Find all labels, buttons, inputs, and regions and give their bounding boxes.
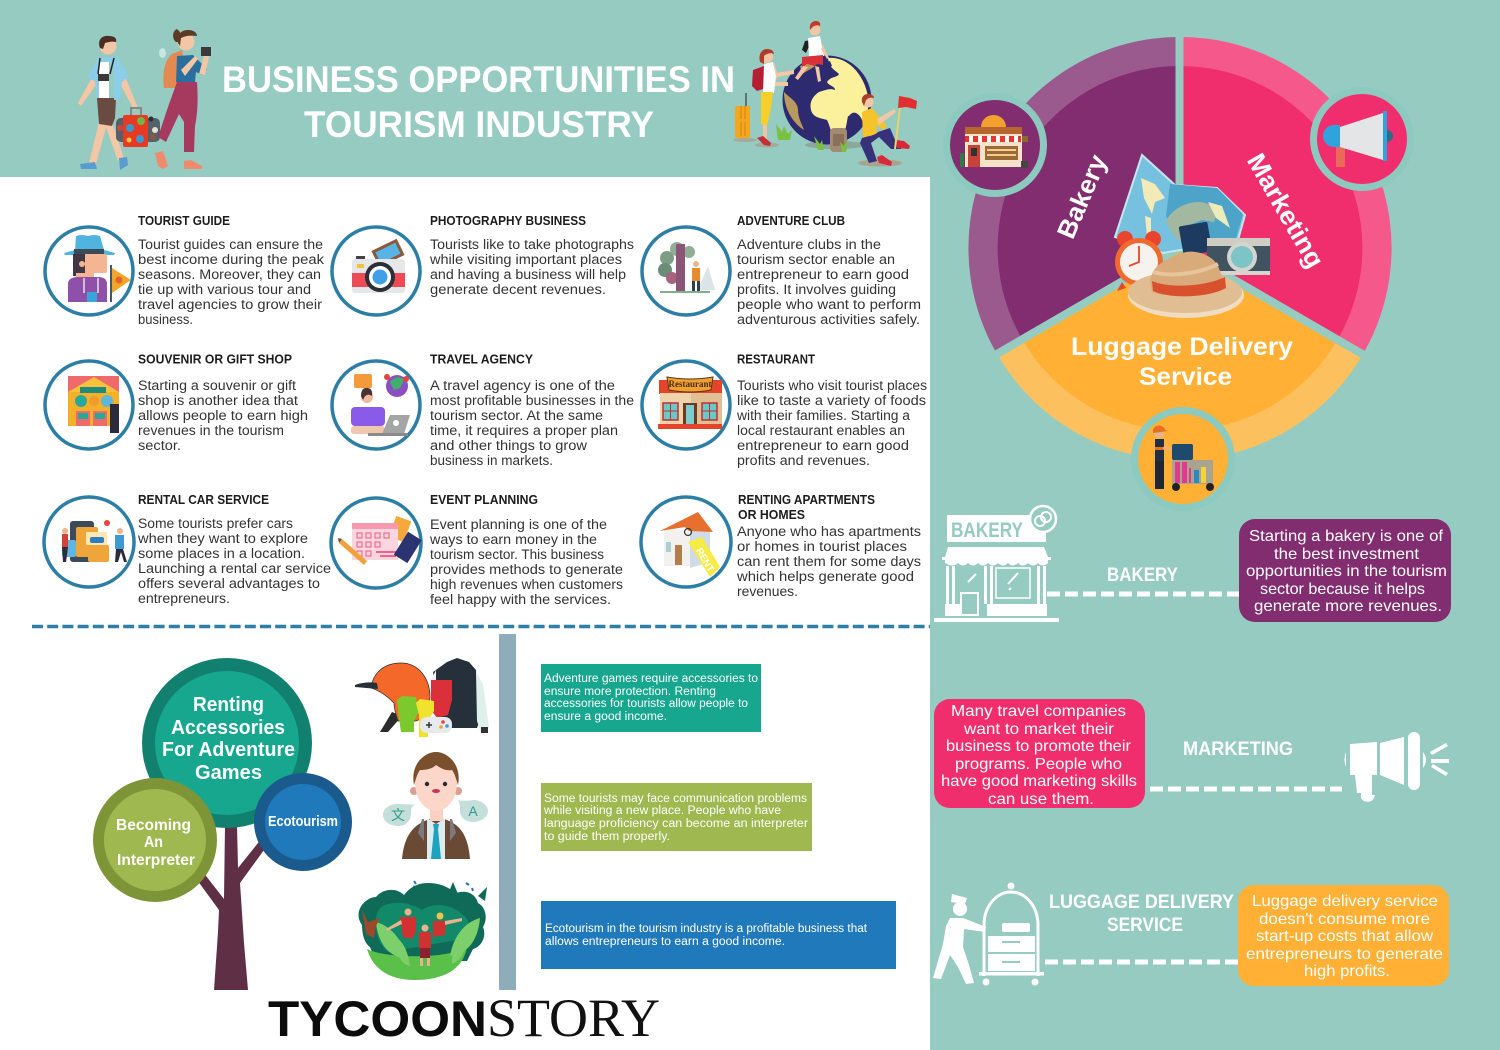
item: event planning: EVENT PLANNING bbox=[430, 493, 538, 507]
circle: renting accessories: Games bbox=[195, 762, 262, 784]
item: rental car service: when they want to explore bbox=[137, 531, 308, 546]
icon: bakery in circle bbox=[943, 93, 1047, 197]
circle: renting accessories: Renting bbox=[193, 694, 264, 716]
icon: porter with luggage cart bbox=[1131, 407, 1235, 511]
item: renting apartments or homes: RENTING APARTMENTS bbox=[738, 493, 875, 507]
item: tourist guide: tie up with various tour and bbox=[138, 282, 311, 297]
callout: marketing: Many travel companies bbox=[951, 703, 1126, 720]
circle: becoming an interpreter: An bbox=[144, 834, 163, 851]
item: adventure club: profits. It involves guiding bbox=[737, 282, 896, 297]
item: souvenir or gift shop: allows people to earn high bbox=[138, 408, 308, 423]
circle: ecotourism bbox=[254, 773, 352, 871]
header banner bbox=[78, 21, 917, 170]
item: souvenir or gift shop: sector. bbox=[138, 438, 181, 453]
item: travel agency: tourism sector. At the same bbox=[430, 408, 603, 423]
item: adventure club: ADVENTURE CLUB bbox=[737, 214, 845, 228]
item: travel agency: most profitable businesses in the bbox=[430, 393, 634, 408]
callout: luggage delivery: high profits. bbox=[1304, 963, 1390, 980]
text box: interpreter: while visiting a new place. People who have bbox=[543, 805, 781, 817]
callout: marketing: can use them. bbox=[988, 791, 1094, 808]
circle: renting accessories bbox=[142, 658, 312, 828]
item: travel agency: TRAVEL AGENCY bbox=[430, 352, 534, 366]
logo: tycoonstory bbox=[268, 988, 660, 1048]
item: adventure club: adventurous activities safely. bbox=[737, 312, 920, 327]
row: bakery detail bbox=[934, 506, 1451, 622]
item: souvenir or gift shop: SOUVENIR OR GIFT SHOP bbox=[138, 352, 292, 366]
item: event planning: high revenues when customers bbox=[430, 577, 623, 592]
callout: bakery: the best investment bbox=[1274, 546, 1420, 563]
callout: marketing: programs. People who bbox=[955, 756, 1122, 773]
text box: ecotourism: allows entrepreneurs to earn a good income. bbox=[545, 936, 785, 948]
item: souvenir or gift shop: Starting a souvenir or gift bbox=[138, 378, 296, 393]
text box: ecotourism bbox=[541, 901, 896, 969]
item: souvenir or gift shop: shop is another idea that bbox=[138, 393, 298, 408]
callout: marketing bbox=[934, 699, 1145, 808]
segment: bakery bbox=[968, 37, 1180, 354]
item: restaurant: with their families. Starting a bbox=[736, 408, 910, 423]
item: rental car service: offers several advantages to bbox=[138, 576, 320, 591]
item: photography business: generate decent revenues. bbox=[430, 282, 606, 297]
circle: becoming an interpreter: Interpreter bbox=[117, 852, 195, 869]
item: event planning: ways to earn money in the bbox=[429, 532, 597, 547]
item: travel agency: and other things to grow bbox=[430, 438, 587, 453]
label: marketing: MARKETING bbox=[1183, 739, 1293, 760]
pie diagram bbox=[943, 30, 1414, 511]
text box: adventure games: accessories for tourists allow people to bbox=[544, 698, 748, 710]
item: tourist guide: travel agencies to grow their bbox=[138, 297, 323, 312]
item: adventure club bbox=[642, 214, 921, 327]
text box: interpreter: Some tourists may face communication problems bbox=[544, 793, 807, 805]
circle: renting accessories: Accessories bbox=[171, 717, 285, 739]
item: restaurant: profits and revenues. bbox=[737, 453, 870, 468]
segment: luggage delivery: Luggage Delivery bbox=[1071, 333, 1293, 361]
text box: adventure games: Adventure games require accessories to bbox=[544, 673, 758, 685]
item: restaurant: like to taste a variety of foods bbox=[737, 393, 926, 408]
callout: luggage delivery: start-up costs that allow bbox=[1256, 928, 1433, 945]
item: adventure club: people who want to perform bbox=[737, 297, 921, 312]
item: travel agency bbox=[332, 352, 634, 468]
item: rental car service: RENTAL CAR SERVICE bbox=[138, 493, 269, 507]
item: photography business: PHOTOGRAPHY BUSINESS bbox=[430, 214, 586, 228]
callout: marketing: business to promote their bbox=[946, 738, 1132, 755]
item: renting apartments or homes: or homes in tourist places bbox=[737, 539, 907, 554]
segment: luggage delivery: Service bbox=[1139, 363, 1232, 391]
illustration: globe with travellers bbox=[733, 21, 917, 166]
callout: luggage delivery: doesn't consume more bbox=[1259, 911, 1430, 928]
logo: tycoonstory: STORY bbox=[487, 988, 660, 1048]
tree trunk bbox=[192, 825, 272, 990]
item: tourist guide: TOURIST GUIDE bbox=[138, 214, 230, 228]
item: tourist guide: business. bbox=[138, 312, 193, 327]
item: adventure club: Adventure clubs in the bbox=[737, 237, 881, 252]
item: restaurant: entrepreneur to earn good bbox=[737, 438, 909, 453]
text box: adventure games: ensure more protection. Renting bbox=[544, 686, 716, 698]
item: event planning: provides methods to generate bbox=[430, 562, 623, 577]
vertical divider bbox=[499, 634, 516, 990]
item: restaurant: Restaurant bbox=[668, 379, 712, 389]
title: TOURISM INDUSTRY bbox=[304, 104, 654, 145]
callout: bakery bbox=[1239, 519, 1451, 622]
item: souvenir or gift shop: revenues in the tourism bbox=[138, 423, 284, 438]
callout: marketing: want to market their bbox=[963, 721, 1115, 738]
panel: white content area bbox=[0, 177, 930, 1050]
item: travel agency: A travel agency is one of the bbox=[430, 378, 615, 393]
item: renting apartments or homes: can rent them for some days bbox=[737, 554, 921, 569]
item: renting apartments or homes: which helps generate good bbox=[736, 569, 914, 584]
circle: ecotourism: Ecotourism bbox=[268, 814, 338, 830]
item: rental car service: Launching a rental car service bbox=[138, 561, 331, 576]
illustration: interpreter: A bbox=[468, 803, 478, 819]
item: adventure club: tourism sector enable an bbox=[737, 252, 895, 267]
item: event planning bbox=[331, 493, 623, 607]
item: rental car service: entrepreneurs. bbox=[138, 591, 230, 606]
text box: adventure games: ensure a good income. bbox=[544, 711, 667, 723]
row: luggage delivery detail bbox=[933, 882, 1449, 986]
item: tourist guide bbox=[45, 214, 324, 327]
tree diagram bbox=[93, 658, 352, 990]
item: event planning: feel happy with the services. bbox=[430, 592, 611, 607]
title bbox=[222, 59, 735, 145]
text box: interpreter bbox=[541, 783, 812, 851]
text box: interpreter: language proficiency can become an interpreter bbox=[544, 818, 808, 830]
callout: bakery: opportunities in the tourism bbox=[1246, 563, 1447, 580]
row: marketing detail bbox=[934, 699, 1449, 808]
illustration: ecotourism bbox=[359, 881, 487, 980]
item: restaurant bbox=[642, 352, 927, 468]
icon: white megaphone bbox=[1344, 732, 1449, 802]
item: tourist guide: seasons. Moreover, they can bbox=[138, 267, 321, 282]
item: renting apartments or homes: OR HOMES bbox=[738, 508, 805, 522]
item: tourist guide: Tourist guides can ensure the bbox=[138, 237, 323, 252]
segment: luggage delivery bbox=[997, 248, 1363, 460]
item: renting apartments or homes: Anyone who has apartments bbox=[737, 524, 921, 539]
logo: tycoonstory: TYCOON bbox=[268, 991, 487, 1047]
illustration: map, clock, camera and hat bbox=[1115, 155, 1270, 318]
segment: marketing: Marketing bbox=[1241, 148, 1331, 273]
label: luggage delivery service: SERVICE bbox=[1107, 915, 1183, 936]
illustration: two tourists with suitcase bbox=[78, 29, 211, 170]
item: event planning: tourism sector. This business bbox=[430, 547, 604, 562]
title: BUSINESS OPPORTUNITIES IN bbox=[222, 59, 735, 100]
label: luggage delivery service bbox=[1049, 892, 1234, 936]
circle: becoming an interpreter bbox=[93, 778, 217, 902]
section: business idea list bbox=[44, 214, 927, 607]
item: travel agency: business in markets. bbox=[430, 453, 553, 468]
item: renting apartments or homes: revenues. bbox=[737, 584, 798, 599]
icon: bakery storefront bbox=[934, 506, 1059, 622]
item: rental car service bbox=[44, 493, 331, 606]
item: restaurant: Tourists who visit tourist places bbox=[737, 378, 927, 393]
callout: luggage delivery: entrepreneurs to generate bbox=[1246, 946, 1443, 963]
item: event planning: Event planning is one of the bbox=[430, 517, 607, 532]
item: restaurant: local restaurant enables an bbox=[737, 423, 905, 438]
icon: bellhop with cart bbox=[933, 882, 1044, 986]
segment: marketing bbox=[1180, 37, 1392, 354]
illustration: interpreter: 文 bbox=[391, 805, 405, 825]
callout: luggage delivery bbox=[1238, 885, 1449, 986]
segment: bakery: Bakery bbox=[1051, 150, 1113, 243]
item: photography business: while visiting important places bbox=[429, 252, 622, 267]
text box: adventure games bbox=[541, 664, 761, 732]
icon: bakery storefront: BAKERY bbox=[951, 519, 1023, 542]
item: adventure club: entrepreneur to earn good bbox=[737, 267, 909, 282]
item: restaurant: RESTAURANT bbox=[737, 352, 815, 366]
item: travel agency: time, it requires a proper plan bbox=[430, 423, 618, 438]
item: souvenir or gift shop bbox=[45, 352, 308, 453]
icon: megaphone in circle bbox=[1310, 87, 1414, 191]
illustration: adventure accessories bbox=[355, 658, 489, 737]
label: luggage delivery service: LUGGAGE DELIVERY bbox=[1049, 892, 1234, 913]
callout: bakery: generate more revenues. bbox=[1254, 598, 1442, 615]
callout: bakery: sector because it helps bbox=[1260, 581, 1425, 598]
item: tourist guide: best income during the peak bbox=[138, 252, 324, 267]
item: rental car service: Some tourists prefer cars bbox=[138, 516, 293, 531]
item: renting apartments or homes: RENT bbox=[693, 546, 716, 574]
callout: bakery: Starting a bakery is one of bbox=[1249, 528, 1444, 545]
item: rental car service: some places in a location. bbox=[138, 546, 305, 561]
circle: becoming an interpreter: Becoming bbox=[116, 817, 191, 834]
circle: renting accessories: For Adventure bbox=[162, 739, 295, 761]
text box: interpreter: to guide them properly. bbox=[544, 831, 670, 843]
callout: marketing: have good marketing skills bbox=[941, 773, 1137, 790]
illustration: interpreter bbox=[383, 752, 488, 859]
item: photography business bbox=[332, 214, 634, 315]
item: photography business: and having a business will help bbox=[430, 267, 626, 282]
item: renting apartments or homes bbox=[641, 493, 921, 599]
callout: luggage delivery: Luggage delivery service bbox=[1252, 893, 1438, 910]
item: photography business: Tourists like to take photographs bbox=[430, 237, 634, 252]
text box: ecotourism: Ecotourism in the tourism industry is a profitable business that bbox=[545, 923, 868, 935]
label: bakery: BAKERY bbox=[1107, 565, 1178, 586]
